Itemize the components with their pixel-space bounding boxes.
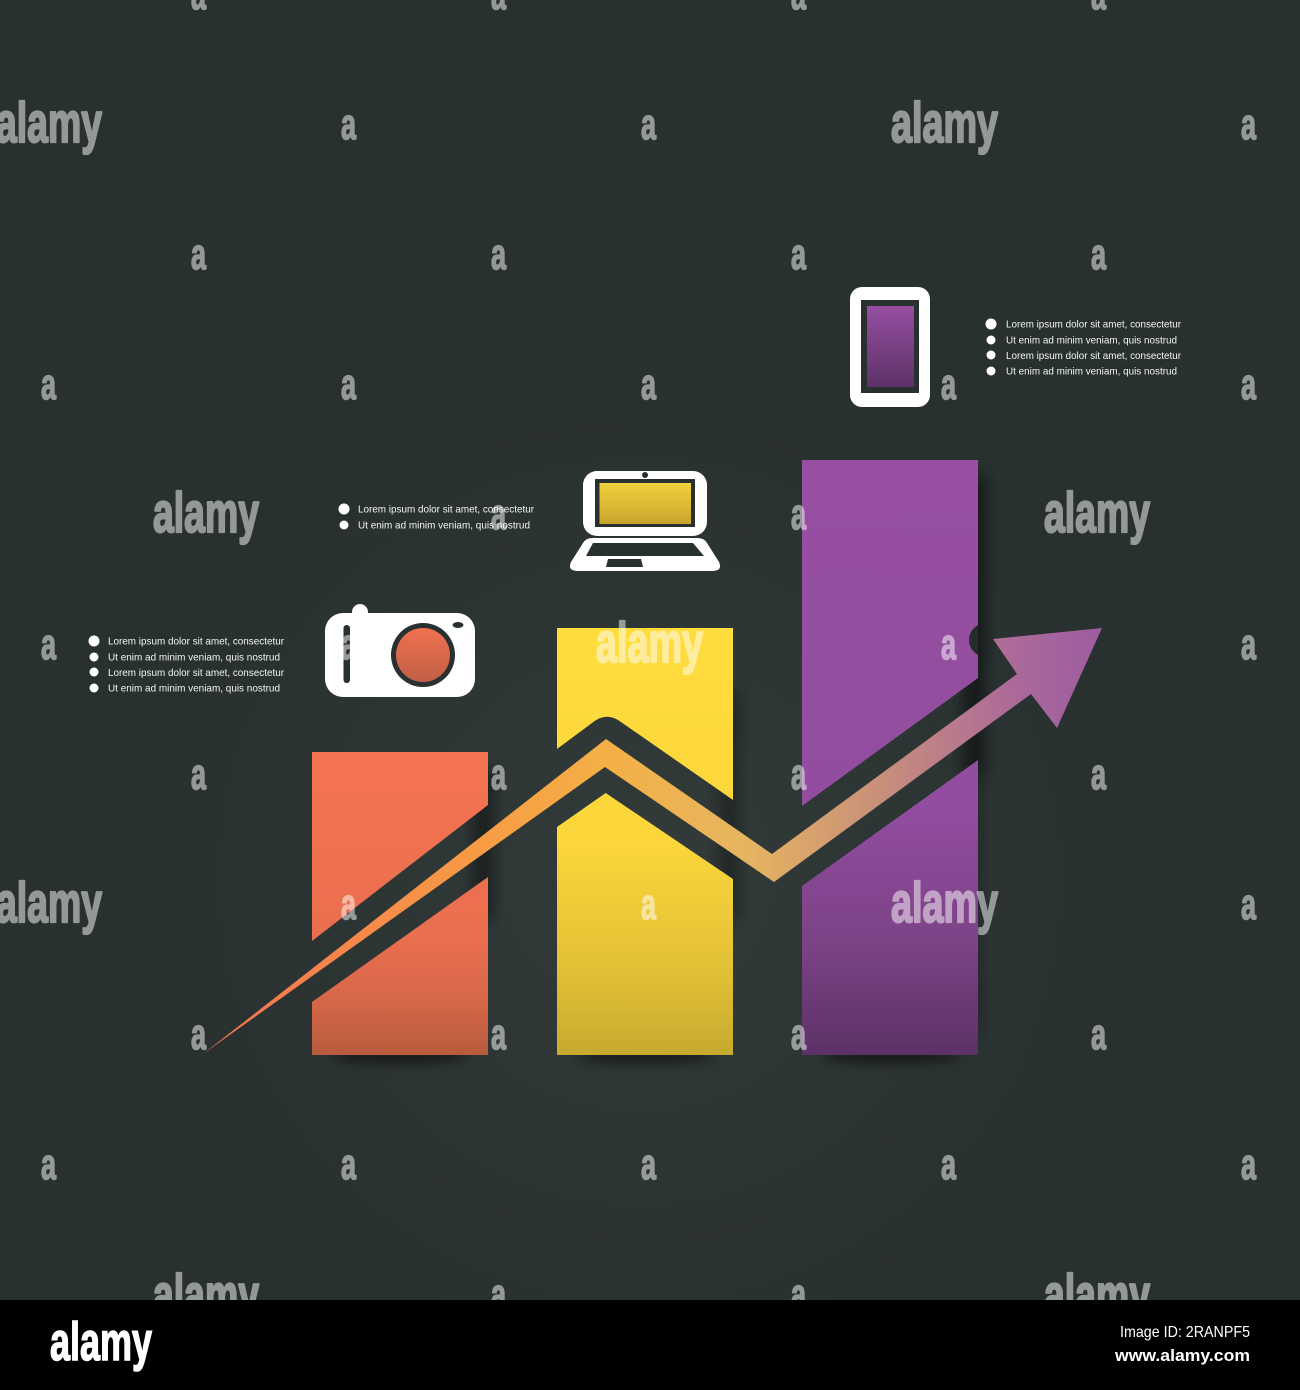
watermarks: a bbox=[191, 750, 206, 799]
watermarks: a bbox=[791, 490, 806, 539]
watermarks: a bbox=[941, 360, 956, 409]
watermarks: a bbox=[491, 1270, 506, 1319]
watermarks: a bbox=[941, 1140, 956, 1189]
bar shadows bbox=[330, 475, 984, 1063]
watermarks: a bbox=[1091, 230, 1106, 279]
watermarks: a bbox=[791, 230, 806, 279]
watermarks: a bbox=[1241, 1140, 1256, 1189]
watermarks: a bbox=[941, 620, 956, 669]
watermarks: a bbox=[341, 100, 356, 149]
watermarks: a bbox=[491, 750, 506, 799]
text list: camera bbox=[88, 636, 284, 694]
watermarks: a bbox=[791, 1270, 806, 1319]
footer logo: alamy bbox=[50, 1312, 152, 1372]
watermarks: a bbox=[491, 230, 506, 279]
text list: smartphone: Lorem ipsum dolor sit amet, consectetur bbox=[1006, 350, 1181, 362]
watermarks: a bbox=[1241, 620, 1256, 669]
text list: laptop: Ut enim ad minim veniam, quis nostrud bbox=[358, 520, 530, 532]
watermarks: alamy bbox=[1044, 1263, 1150, 1327]
watermarks: a bbox=[1091, 750, 1106, 799]
bar: camera, orange-red bbox=[312, 752, 488, 1055]
watermarks: a bbox=[641, 360, 656, 409]
text list: smartphone: Ut enim ad minim veniam, quis nostrud bbox=[1006, 366, 1177, 378]
rounded band end near arrow head bbox=[969, 625, 978, 655]
icon: camera bbox=[325, 604, 475, 697]
watermarks: a bbox=[491, 490, 506, 539]
watermarks: a bbox=[1091, 1010, 1106, 1059]
watermarks: a bbox=[641, 1140, 656, 1189]
watermarks: a bbox=[41, 1140, 56, 1189]
watermarks: a bbox=[341, 880, 356, 929]
watermarks: a bbox=[491, 1010, 506, 1059]
text list: smartphone bbox=[986, 318, 1181, 378]
growth arrow bbox=[203, 628, 1102, 1054]
text list: smartphone: Lorem ipsum dolor sit amet, consectetur bbox=[1006, 318, 1181, 330]
bar: phone, purple bbox=[802, 460, 978, 1055]
website: www.alamy.com bbox=[1114, 1346, 1250, 1365]
watermarks: a bbox=[641, 880, 656, 929]
watermarks: alamy bbox=[0, 871, 102, 935]
watermarks: a bbox=[341, 1140, 356, 1189]
watermarks: a bbox=[1241, 100, 1256, 149]
watermarks: alamy bbox=[891, 871, 998, 935]
text list: laptop: Lorem ipsum dolor sit amet, consectetur bbox=[358, 504, 534, 516]
text list: camera: Lorem ipsum dolor sit amet, consectetur bbox=[108, 636, 284, 648]
watermarks: alamy bbox=[153, 1263, 259, 1327]
text list: camera: Lorem ipsum dolor sit amet, consectetur bbox=[108, 667, 284, 679]
watermarks: a bbox=[341, 620, 356, 669]
watermarks: a bbox=[341, 360, 356, 409]
background glow bbox=[160, 400, 1120, 1360]
text list: camera: Ut enim ad minim veniam, quis nostrud bbox=[108, 652, 280, 664]
image id: Image ID: 2RANPF5 bbox=[1120, 1324, 1250, 1341]
text list: camera: Ut enim ad minim veniam, quis nostrud bbox=[108, 682, 280, 694]
icon: smartphone bbox=[850, 287, 930, 407]
watermarks: a bbox=[791, 750, 806, 799]
footer bar bbox=[0, 1300, 1300, 1390]
icon: laptop bbox=[570, 471, 720, 571]
watermarks: a bbox=[41, 620, 56, 669]
watermarks: a bbox=[191, 1010, 206, 1059]
watermarks: a bbox=[41, 360, 56, 409]
text list: laptop bbox=[338, 504, 534, 532]
watermarks: alamy bbox=[596, 611, 703, 675]
bar: laptop, yellow bbox=[557, 628, 733, 1055]
watermarks: a bbox=[791, 1010, 806, 1059]
watermarks: alamy bbox=[0, 91, 102, 155]
watermarks: alamy bbox=[891, 91, 998, 155]
watermarks: a bbox=[1241, 880, 1256, 929]
watermarks: a bbox=[1241, 360, 1256, 409]
watermarks: a bbox=[641, 100, 656, 149]
watermarks: alamy bbox=[153, 481, 259, 545]
text list: smartphone: Ut enim ad minim veniam, quis nostrud bbox=[1006, 334, 1177, 346]
watermarks: alamy bbox=[1044, 481, 1150, 545]
watermarks: a bbox=[191, 230, 206, 279]
